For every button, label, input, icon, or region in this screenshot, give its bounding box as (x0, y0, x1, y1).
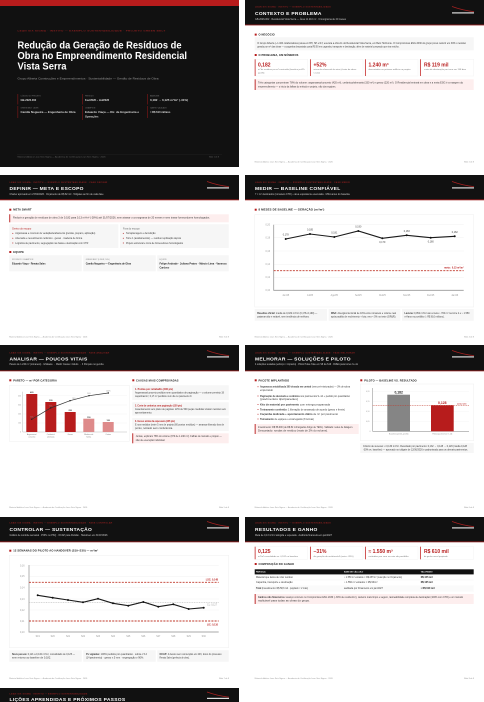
line chart: baseline: 0,20 (266, 225, 271, 227)
KPI cards: +52% (314, 62, 327, 68)
note cards: MSA: divergência inicial de 10% entre romaneio e volume real (331, 312, 396, 315)
heading: baseline: 8 MESES DE BASELINE — GERAÇÃO (m³/m²) (258, 207, 324, 212)
solution list: (pavimentos tipo/paredes) (260, 398, 298, 401)
note cards: sem retorno ao baseline de 0,182. (12, 656, 51, 660)
scope out (120, 224, 229, 248)
control chart: S22 (81, 636, 86, 638)
cause cards: não de execução individual. (136, 439, 166, 442)
cover metadata grid: BASELINE (150, 95, 160, 98)
solution list: Caçamba dedicada + apontamento diário de m³ por pavimento (260, 413, 339, 416)
gain table: PARCELA (256, 571, 266, 574)
line chart: baseline: 0,185 (307, 229, 314, 232)
line chart: baseline: Jul/25 (307, 295, 314, 297)
KPI cards: ≈ 1.550 m³ (368, 549, 393, 555)
pilot note: Critério de sucesso: ≤ 0,130 m³/m². Resultado por pavimento: 0,132 → 0,128 → 0,126 (média 0,128 (363, 445, 468, 448)
line chart: baseline: 0,178 (283, 234, 289, 237)
slide 4: medir (245, 175, 484, 339)
header: CONTEXTO E PROBLEMA (255, 11, 322, 17)
team cards: EQUIPE (160, 259, 167, 261)
line chart: baseline: 0,16 (266, 251, 271, 253)
heading: o negócio: O NEGÓCIO (258, 32, 275, 37)
heading: o negócio (255, 32, 275, 37)
cause cards: caçambas/m³, 0,17 m³ perdidos num dia no pavimento 9. (135, 395, 192, 398)
context box: gerado por m² das obras — a caçamba descartada custa R$ 90 em caçamba, transporte e destinação, além de material comprado que vira entulho. (257, 45, 400, 48)
note cards (255, 309, 474, 321)
heading: pareto: PARETO — m³ POR CATEGORIA (13, 378, 57, 382)
cover metadata grid: CHAMPION (85, 107, 96, 110)
gain table: R$ 165 mil (421, 581, 433, 584)
note cards: Ps vigiadas: 100% pedidos por quantitativo · sobra ≤ 5 d (86, 653, 148, 656)
pareto chart: 100% (106, 390, 111, 392)
cover metadata grid: ≈ R$ 610 mil/ano (150, 110, 171, 114)
footer: Slide 3 de 8 (219, 337, 229, 339)
KPI cards: descartados no próximo edifício no projeto (368, 68, 411, 71)
cover title (18, 40, 187, 72)
gain table: auditada por Financeiro em jan/2027 (344, 587, 384, 590)
pareto chart (9, 385, 129, 441)
alert (255, 79, 474, 90)
KPI cards (255, 547, 474, 559)
header: LEAN SIX SIGMA · INSTITU — EXEMPLO SUSTENTABILIDADE · FASE MELHORAR (255, 351, 355, 354)
control chart: S25 (126, 636, 131, 638)
cover metadata grid: CÓDIGO DO PROJETO (20, 95, 41, 98)
control chart: CL: 0,127 (207, 604, 218, 606)
header (245, 345, 484, 371)
pareto chart: 330 (49, 400, 53, 402)
scope out: Fora do escopo (123, 227, 140, 230)
finance alert: Ganhos não financeiros: avanço concreto no Compromisso ESG 2030 (−30% de resíduo/m²), canteiro mais limpo e seguro, rastreabilidade completa de destinação (100% com CTR) e um método (258, 596, 464, 599)
footer (255, 336, 474, 339)
scope in: Dentro do escopo (12, 227, 32, 230)
cover metadata grid: GANHO VALIDADO (150, 107, 167, 110)
pilot bar chart: 0,10 (366, 411, 370, 413)
header: LEAN SIX SIGMA · INSTITU — EXEMPLO SUSTENTABILIDADE · FASE ANALISAR (10, 351, 110, 354)
KPI cards: de geração de resíduos/m² (meta: -28%) (314, 555, 354, 558)
cause cards: E nos medidos (entre 5 mm de projeto (80 pontos medidos) — amassar liberado fora de (135, 423, 225, 426)
pareto chart: Argamassa/ (27, 433, 37, 436)
header: LEAN SIX SIGMA · INSTITU — EXEMPLO SUSTENTABILIDADE · FASE CONTROLAR (10, 522, 113, 524)
heading: problema em números (255, 52, 299, 57)
control chart: S19 (36, 636, 40, 638)
slide 9: lições aprendidas header (0, 688, 239, 702)
header (0, 175, 239, 200)
control chart: 0,13 (20, 599, 25, 601)
note cards: m³/ano no portfólio (≈ R$ 610 mil/ano). (404, 316, 445, 319)
gain table: Total (investimento: R$ 58,6 mil · payback < 2 mês) (256, 587, 308, 590)
line chart: baseline (255, 215, 474, 307)
pareto chart: 300 (18, 405, 21, 407)
cause cards: Juntas, explicam 78% do volume (970 de 1.240 m³). Falhas de método e projeto — (136, 435, 222, 438)
pilot bar chart: 0,128 (438, 401, 447, 405)
header (0, 345, 239, 371)
control chart: S23 (96, 636, 101, 638)
control chart (9, 555, 229, 648)
context box (255, 37, 474, 50)
heading: pacote: PACOTE IMPLANTADO (258, 378, 289, 382)
header: ANALISAR — POUCOS VITAIS (10, 356, 88, 362)
KPI cards: −31% (314, 549, 327, 555)
header: LEAN SIX SIGMA · INSTITU — EXEMPLO SUSTENTABILIDADE (255, 522, 331, 524)
line chart: baseline: 0,190 (355, 226, 362, 229)
header: Pareto de 1.240 m³ (romaneio) · Ishikawa → Matriz Causa × Efeito → 3 Porquês no gemba (10, 363, 104, 366)
footer: Slide 2 de 8 (464, 162, 474, 164)
header: RESULTADOS E GANHO (255, 527, 318, 533)
alert: empreendimento — o início da falhas do método e projeto, não dos equipes. (258, 85, 336, 88)
cause cards: ponto, retirado sem conferência. (135, 427, 173, 430)
cover footer: Material didático Lean Seis Sigma — Academia de Certificação Lean Seis Sigma · 2026 (18, 156, 106, 158)
control chart: 0,10 (20, 632, 25, 634)
KPI cards: jan/26) (257, 72, 265, 74)
cover metadata grid: GREEN BELT LÍDER (20, 107, 39, 110)
KPI cards: acima do referencial do setor (cluster de obras: (314, 68, 357, 71)
KPI cards: 0,125 (258, 549, 271, 555)
line chart: baseline: Out/25 (379, 294, 386, 297)
line chart: baseline: Jan/26 (451, 295, 459, 297)
heading: causas (132, 378, 179, 382)
line chart: baseline: Nov/25 (403, 295, 411, 297)
solution list: Treinamento de equipes e encarregados (8 turmas) (260, 418, 314, 421)
slide 7: controlar (0, 517, 239, 680)
slide 3: definir (0, 175, 239, 339)
gain table: R$ 445 mil (421, 576, 433, 579)
KPI cards: 0,182 (258, 62, 271, 68)
team cards: SPONSOR / CHAMPION (12, 258, 34, 261)
pareto chart: Gesso (68, 434, 73, 436)
smart goal: Reduzir a geração de resíduos de obra 3 de 0,182 para 0,13 m³/m² (-28%) até 31/07/2026, sem atrasar o cronograma de 20 meses e sem travar fornecedores homologados. (13, 217, 210, 220)
pareto chart: 200 (18, 414, 21, 416)
pareto chart: 400 (18, 395, 21, 397)
line chart: baseline: Set/25 (355, 294, 362, 297)
cause cards: 1. Pontas por retrabalho (180 pts) (135, 388, 173, 391)
note cards: patamar alto e estável, sem tendência de melhora. (257, 316, 310, 319)
KPI cards: evitados por ano no mix do portfólio (368, 555, 410, 558)
solution list: Argamassa estabilizada 300 dosada em central (sem pré-misturados) — 3% de sobra (260, 386, 351, 388)
header: LEAN SIX SIGMA · INSTITU — EXEMPLO SUSTENTABILIDADE · FASE DEFINIR (10, 181, 108, 184)
pareto chart: 78% (72, 398, 76, 400)
cover footer (17, 154, 222, 158)
scope in: Argamassa e concreto de vedação/acabamento (perdas, preparo, aplicação) (15, 232, 95, 235)
solution list: Treinamento conferido: 1 liberação de amassado de acordo (gesso e frente) (260, 408, 345, 411)
pareto chart: Cerâmica/ (47, 434, 55, 436)
control chart: 0,14 (20, 588, 25, 590)
scope out: Projeto estrutural e troca de fornecedores homologados (126, 242, 184, 245)
heading: problema em números: O PROBLEMA, EM NÚMEROS (258, 52, 299, 57)
pareto chart: 420 (30, 391, 34, 394)
pilot note (360, 443, 474, 453)
footer: Material didático Lean Seis Sigma — Academia de Certificação Lean Seis Sigma · 2026 (9, 677, 87, 680)
header: LEAN SIX SIGMA · INSTITU — EXEMPLO SUSTENTABILIDADE · FASE MEDIR (255, 181, 350, 184)
header: DEFINIR — META E ESCOPO (10, 186, 84, 192)
slide 2: contexto e problema (245, 0, 484, 164)
heading: piloto: PILOTO — BASELINE VS. RESULTADO (364, 378, 417, 382)
heading: pareto (9, 378, 57, 382)
control chart: S27 (156, 636, 161, 638)
scope in (9, 224, 118, 248)
finance alert (255, 594, 474, 604)
control chart: 0,12 (20, 610, 25, 612)
footer: Slide 6 de 8 (464, 507, 474, 509)
slide 6: melhorar (245, 345, 484, 509)
pilot bar chart: Baseline (jun/25–jan/26) (389, 434, 409, 436)
pareto chart: 150 (87, 417, 91, 419)
pareto chart: Madeira de (84, 434, 93, 436)
header: CONTROLAR — SUSTENTAÇÃO (10, 526, 92, 533)
heading: baseline (255, 207, 324, 212)
heading: meta smart: META SMART (13, 208, 32, 212)
heading: piloto (360, 378, 417, 382)
control chart: LIC: 0,110 (207, 624, 219, 627)
KPI cards: R$ 119 mil (424, 62, 449, 68)
pilot bar chart: 0,182 (394, 390, 403, 394)
pilot bar chart: 0 (370, 431, 371, 433)
heading: causas: CAUSAS MAIS COMPROVADAS (136, 378, 179, 382)
footer (9, 336, 229, 339)
header (245, 0, 484, 25)
slide 9: lições aprendidas header: LEAN SIX SIGMA · INSTITU — EXEMPLO SUSTENTABILIDADE (10, 692, 88, 696)
pilot bar chart: 0,15 (366, 401, 370, 403)
pareto chart: 120 (107, 420, 111, 422)
gain table: ≈ 1.550 m³ evitados × R$ 96/m³ (344, 581, 378, 584)
gain table: ≈ R$ 610 mil (421, 587, 435, 590)
control chart: 0,16 (20, 566, 25, 568)
control chart: S28 (171, 636, 176, 638)
pareto chart: 0 (20, 432, 21, 434)
KPI cards: de ganho anual projetado (424, 555, 448, 558)
header: GB-2026-002 · Residencial Vista Serra — Área 11.210 m² · Cronograma de 20 meses (255, 18, 347, 21)
note cards: OCAP: 4 desvio sem contenção em 24h; dono do processo (160, 653, 222, 656)
cause cards: aproveitamento. (135, 412, 152, 415)
investment alert: Investimento: R$ 58.000 (de R$ 82 mil largados Artigo de TEOL). Validado: redes de listagem. (258, 426, 353, 429)
cover metadata grid: Operações (85, 114, 99, 118)
line chart: baseline: 0,182 (452, 231, 458, 234)
gain table: ≈ 1.550 m³ evitados × R$ 287/m³ (retenção no Orçamento) (344, 576, 402, 579)
KPI cards (255, 59, 474, 76)
solution list: Kits de material por pavimento com entrega programada (260, 403, 331, 406)
slide 5: analisar (0, 345, 239, 509)
line chart: baseline: 0,183 (404, 230, 410, 233)
line chart: baseline: meta : 0,13 m³/m² (444, 266, 464, 270)
pareto chart: 100 (18, 423, 21, 425)
pareto chart: 60% (49, 405, 53, 407)
note cards: após padrão de enchimento + foto; erro < 5% no teste (GR&R). (331, 316, 396, 319)
footer: Slide 7 de 8 (219, 678, 229, 680)
slide 8: resultados e ganho (245, 517, 484, 680)
footer (9, 506, 229, 509)
line chart: baseline: 0,14 (266, 264, 271, 266)
footer: Material didático Lean Seis Sigma — Academia de Certificação Lean Seis Sigma · 2026 (255, 506, 333, 509)
finance alert: replicável para todas as obras do grupo. (258, 600, 310, 603)
cause cards (132, 385, 229, 443)
pareto chart: Outros (105, 433, 111, 436)
team cards: Eduardo Viaça · Renata Sales (12, 262, 46, 265)
cover metadata grid: PERÍODO (85, 95, 94, 98)
team cards: Cardoso (160, 266, 170, 270)
line chart: baseline: 0,180 (428, 240, 434, 244)
cover kicker: LEAN SIX SIGMA · INSTITU — EXEMPLO SUSTENTABILIDADE · PROJETO GREEN BELT (18, 29, 166, 32)
gain table: BASE DE CÁLCULO (344, 571, 364, 574)
header (245, 517, 484, 542)
header: 7 × m³ destinados (romaneio CTR) ÷ área equivalente executada · MSA antes do baseline (255, 193, 351, 196)
cover title: Vista Serra (18, 62, 67, 72)
line chart: baseline: 0,12 (266, 277, 271, 279)
footer: Material didático Lean Seis Sigma — Academia de Certificação Lean Seis Sigma · 2026 (255, 161, 333, 164)
alert: Três categorias concentram 78% do volume: argamassa/concreto (420 m³), cerâmica/alvenaria (330 m³) e gesso (220 m³). O Residencial entrará em obra e a meta ESG é a margem do (258, 82, 464, 85)
team cards: Felipe Andrade · Juliana Prates · Márcio Lima · Vanessa (160, 262, 227, 265)
footer: Material didático Lean Seis Sigma — Academia de Certificação Lean Seis Sigma · 2026 (255, 336, 333, 339)
control chart: S29 (187, 636, 191, 638)
cover metadata grid: Eduardo Viaça — Dir. de Engenharia e (85, 110, 140, 114)
team cards (9, 255, 229, 271)
context box: O Grupo Alberta (~1.400 colaboradores) atua em BH, SP e RJ; executa a obra 11 do Residencial Vista Serra, em Belo Horizonte. O Compromisso ESG 2030 do grupo prevê reduzir em 30% o resíduo (257, 42, 467, 45)
footer (255, 506, 474, 509)
gain table (255, 569, 474, 591)
pareto chart: forma (87, 437, 91, 439)
footer: Material didático Lean Seis Sigma — Academia de Certificação Lean Seis Sigma · 2026 (9, 506, 87, 509)
cover metadata grid: 0,182 → 0,125 m³/m² (-31%) (150, 98, 188, 102)
solution list (258, 386, 351, 421)
gain table: Material que deixa de virar resíduo (256, 576, 293, 579)
heading: 12 semanas (9, 549, 98, 553)
control chart: LSC: 0,148 (206, 578, 219, 581)
header: LEAN SIX SIGMA · INSTITU — EXEMPLO SUSTENTABILIDADE (255, 6, 331, 9)
solution list: Paginação de alvenaria e cerâmica nos pavimentos 9–14 + pedido por quantitativo (260, 395, 351, 398)
footer (255, 161, 474, 164)
header: MELHORAR — SOLUÇÕES E PILOTO (255, 355, 351, 362)
slide 1: cover (0, 0, 239, 167)
KPI cards: m³/m² consolidado vs. 0,182 na baseline (258, 555, 299, 558)
scope in: Logística de pavimento, segregação nas baias e destinação com CTR (15, 242, 89, 245)
team cards: Camila Nogueira — Engenharia de Obra (86, 262, 132, 265)
gain table: Caçamba, transporte e destinação (256, 581, 293, 584)
control chart: S24 (111, 636, 116, 638)
header (0, 517, 239, 542)
pilot bar chart (360, 384, 474, 441)
pilot bar chart: meta: 0,13 (457, 402, 466, 405)
pilot bar chart: 0,20 (366, 391, 370, 393)
cover metadata grid: GB-2026-002 (20, 98, 37, 102)
pilot bar chart: Piloto (pavimentos 9–14) (432, 433, 453, 436)
investment alert (255, 424, 359, 434)
control chart: 0,15 (20, 576, 25, 578)
heading: 12 semanas: 12 SEMANAS DO PILOTO AO HANDOVER (S19–S30) — m³/m² (13, 549, 98, 553)
pareto chart: 90% (87, 393, 91, 395)
pilot bar chart: 0,05 (366, 421, 370, 423)
KPI cards: m³ de resíduos por m² construído (baseline jun/25- (258, 68, 305, 71)
cause cards: 2. Corte de cerâmica sem paginação (150 pts) (135, 404, 182, 407)
smart goal (9, 214, 229, 222)
header: Gráfico de controle semanal · POPs no PSQ · OCAP para Divisão · Handover em 31/07/2026 (10, 534, 108, 537)
line chart: baseline: 0,10 (266, 290, 271, 292)
line chart: baseline: Dez/25 (427, 295, 435, 297)
cover subtitle: Grupo Alberta Construções e Empreendimentos · Sustentabilidade — Gestão de Resíduos de Obra (18, 76, 159, 80)
note cards: Renato Sales (gerência de obra). (160, 656, 190, 660)
solution list: empurrando (260, 389, 274, 392)
header: 4 soluções testadas (esforço × impacto) · Piloto Poka-Yoke em S8 da S19 · FMEA para torres 3+ do (255, 363, 359, 366)
pareto chart: 34% (30, 416, 34, 418)
cause cards: Argamassa/concreto pedidos sem quantitativo de paginação — o volume previsto 19 (135, 391, 225, 394)
line chart: baseline: Jun/25 (282, 295, 290, 297)
header: MEDIR — BASELINE CONFIÁVEL (255, 185, 341, 192)
heading: composição: COMPOSIÇÃO DO GANHO (258, 561, 294, 566)
footer (9, 677, 229, 680)
pareto chart: 220 (69, 410, 73, 412)
KPI cards: R$ 610 mil (424, 549, 449, 555)
header: Meta de 0,13 m³/m² atingida e superada · Auditoria financeira em jan/2027 (255, 534, 333, 537)
cover metadata grid: Camila Nogueira — Engenharia de Obra (20, 110, 76, 114)
control chart: S20 (51, 636, 55, 638)
cause cards: Assentamento sem plano de paginas: 22% de 500 peças medidas viraram resíduo sem (135, 408, 226, 411)
investment alert: Descartado: rondas de resíduo (mais de 2% do volume). (258, 429, 328, 432)
cover title: Redução da Geração de Resíduos de (18, 40, 182, 52)
footer: Material didático Lean Seis Sigma — Academia de Certificação Lean Seis Sigma · 2026 (9, 336, 87, 339)
cover footer: Slide 1 de 8 (209, 156, 219, 158)
line chart: baseline: 0,179 (379, 241, 386, 244)
footer: Slide 4 de 8 (464, 337, 474, 339)
control chart: 0,11 (20, 621, 25, 623)
header (245, 175, 484, 200)
team cards: GREEN BELT (LÍDER, 50%) (86, 258, 110, 261)
cause cards: 3. Gesso acima da espessura (135 pts) (135, 420, 175, 423)
cover metadata grid: Fev/2026 – Jul/2026 (85, 98, 110, 102)
heading: equipe (9, 250, 24, 254)
heading: composição (255, 561, 294, 566)
note cards: Baseline oficial: média de 0,182 m³/m² (0,178–0,190) — (257, 312, 318, 315)
heading: meta smart (9, 208, 32, 212)
footer (255, 677, 474, 680)
scope out: Terraplenagem e demolição (126, 232, 156, 235)
KPI cards: custo de destinação por torre em 198 dias (424, 68, 466, 71)
cover title: Obra no Empreendimento Residencial (18, 51, 187, 62)
note cards (9, 650, 229, 662)
line chart: baseline: 0,18 (266, 238, 271, 240)
KPI cards: 1.240 m³ (368, 62, 389, 68)
note cards: (1ª/pavimento) · gesso ≤ 5 mm · segregação ≥ 90%. (86, 656, 144, 660)
cover metadata grid (17, 94, 188, 120)
control chart: S21 (66, 636, 71, 638)
control chart: S26 (141, 636, 146, 638)
pilot note: -30% vs. baseline) — aprovado no tollgate de 12/06/2026 e padronizado para os demais pavimentos. (363, 448, 468, 452)
pareto chart: concreto (28, 436, 35, 439)
footer: Material didático Lean Seis Sigma — Academia de Certificação Lean Seis Sigma · 2026 (255, 677, 333, 680)
footer: Slide 8 de 8 (464, 678, 474, 680)
gain table: VALOR/ANO (421, 571, 433, 574)
header: Charter aprovado em 27/02/2026 · Orçamento de R$ 82 mil · Tollgates ao fim de cada fase (10, 193, 104, 196)
heading: pacote (255, 378, 289, 382)
line chart: baseline: 0,181 (331, 232, 338, 235)
KPI cards: ≤ 0,12) (314, 71, 320, 74)
note cards: Lacuna: 0,052 m³/m² até a meta ≈ 700 m³ na torre 2 e ≈ 1.550 (404, 312, 470, 315)
pareto chart: alvenaria (47, 437, 54, 439)
scope out: Torre 1 (acabamentos) — resíduo replicação depois (126, 237, 182, 240)
heading: equipe: EQUIPE (13, 250, 24, 254)
line chart: baseline: Ago/25 (331, 294, 339, 297)
footer: Slide 5 de 8 (219, 507, 229, 509)
note cards: Nova pessoa: 0,121 a 0,132 m³/m², consolidado de 0,125 — (12, 653, 76, 656)
scope in: Alvenaria e revestimento cerâmico · gesso · madeira de forma (15, 237, 83, 240)
control chart: S30 (202, 636, 206, 638)
